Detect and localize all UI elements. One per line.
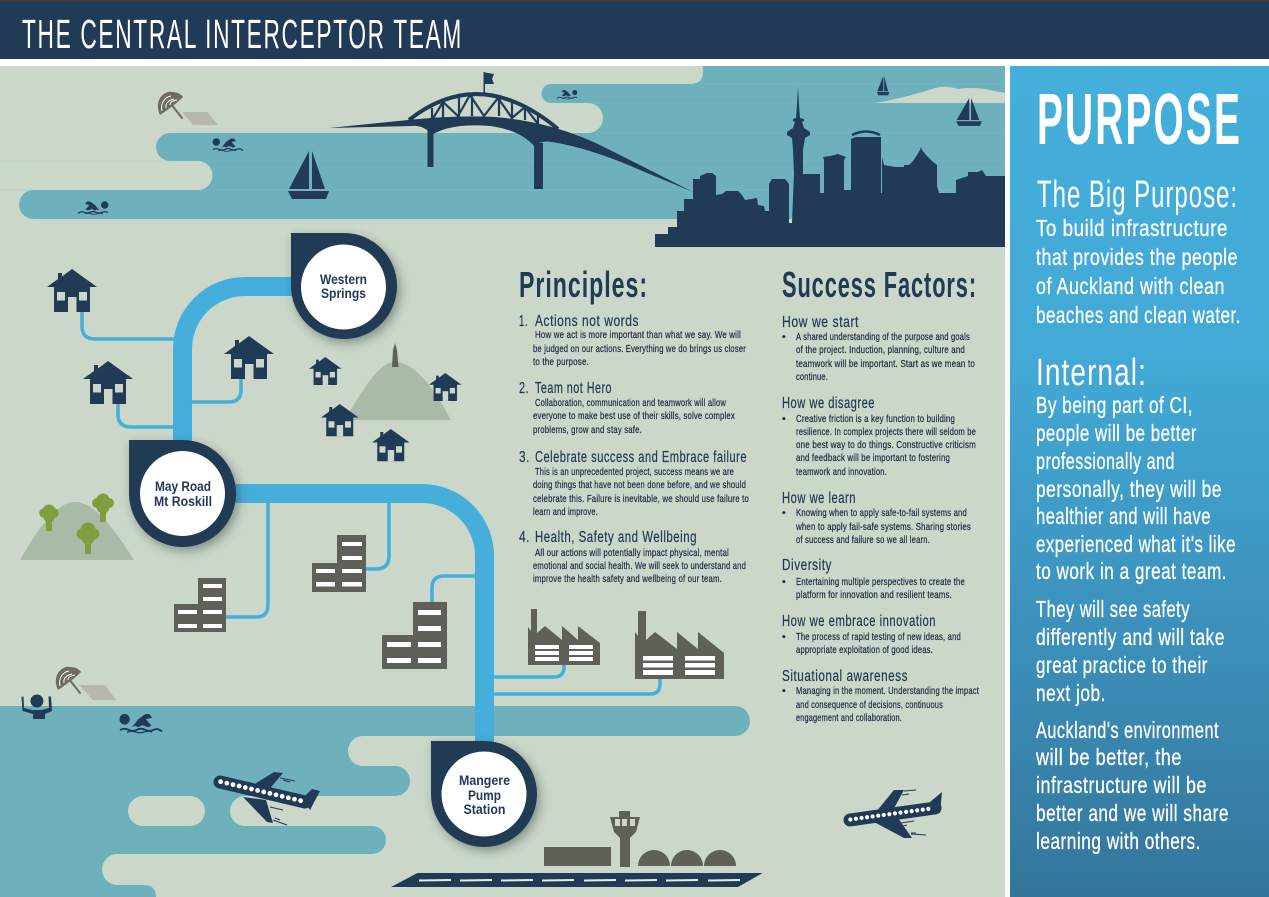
factor: how we embrace innovation: appropriate exploitation of good ideas. [796,644,933,656]
house 2 [83,361,133,404]
pin: may road [129,440,236,547]
airport terminal [544,847,611,866]
principle 2: Team not Hero [535,380,612,397]
land background [0,66,1005,897]
principle 4: emotional and social health. We will seek to understand and [533,560,746,572]
top harbour water [0,66,1005,219]
office building 2 [312,535,366,592]
principle 3 [519,449,749,518]
factor: how we disagree: one best way to do things. Constructive criticism [796,439,976,451]
safety text: next job. [1036,680,1106,706]
house 1 [47,269,97,312]
principle 2: 2. [519,380,529,397]
factor: how we start: of the project. Induction, planning, culture and [796,344,965,356]
factor: situational awareness [782,668,979,724]
factor: how we learn: How we learn [782,490,856,507]
factor: how we learn: • [782,507,786,519]
principle 2: Collaboration, communication and teamwork will allow [535,397,726,409]
factor: how we start: • [782,331,786,343]
pin: may road: May Road [155,479,211,494]
factor: diversity: Diversity [782,557,832,574]
internal text: By being part of CI, [1036,392,1193,418]
factor: how we disagree: • [782,413,786,425]
environment text: infrastructure will be [1036,772,1207,798]
person waving [22,694,52,719]
pin: mangere pump station [431,741,537,847]
factor: how we learn [782,490,971,546]
factor: how we start: A shared understanding of the purpose and goals [796,331,970,343]
factor: how we start: continue. [796,371,828,383]
principle 3: doing things that have not been done before, and we should [533,479,746,491]
success factors heading: Success Factors: [782,264,977,305]
factor: how we disagree: Creative friction is a key function to building [796,413,955,425]
swimmer: bottom [119,714,162,733]
flag [484,72,494,95]
factor: how we embrace innovation: The process of rapid testing of new ideas, and [796,631,961,643]
factory 1 [528,609,600,665]
principle 4: All our actions will potentially impact physical, mental [535,547,729,559]
pin: mangere pump station: Mangere [459,773,510,788]
principle 1: Actions not words [535,313,639,330]
factor: situational awareness: engagement and collaboration. [796,712,902,724]
swimmer: left [78,201,108,214]
principles heading: Principles: [519,264,648,305]
control tower [610,811,640,867]
principle 3: 3. [519,449,530,466]
principle 3: Celebrate success and Embrace failure [535,449,747,466]
harbour bridge [329,72,693,192]
swimmer: top [213,138,243,151]
principle 4: 4. [519,529,530,546]
pin: western springs: Western [320,272,367,287]
beach umbrella: bottom [56,667,116,700]
factor: how we disagree [782,395,976,478]
factor: how we learn: when to apply fail-safe systems. Sharing stories [795,521,971,533]
pin: mangere pump station: Pump [468,788,501,803]
houses [47,269,462,461]
environment text: will be better, the [1035,744,1182,770]
city skyline [655,86,1005,247]
environment text [1035,717,1229,854]
internal text: professionally and [1036,448,1175,474]
factor: how we embrace innovation: • [782,631,786,643]
principles section [519,264,749,585]
factor: how we start: How we start [782,314,859,331]
principle 2 [519,380,735,436]
house connection pipes [82,312,241,427]
safety text: They will see safety [1036,596,1190,622]
pin: may road: Mt Roskill [154,494,212,509]
factor: how we learn: of success and failure so we all learn. [796,534,930,546]
safety text: great practice to their [1036,652,1208,678]
main pipe: may road to mangere [230,494,485,750]
factor: how we disagree: and feedback will be important to fostering [796,452,950,464]
principle 4 [519,529,746,585]
office building 3 [382,602,447,669]
internal text [1036,392,1236,584]
principle 4: improve the health safety and wellbeing of our team. [533,573,722,585]
factor: situational awareness: • [782,685,786,697]
principle 1: 1. [519,313,528,330]
principle 1 [519,313,746,368]
big purpose text: To build infrastructure [1036,215,1228,241]
factor: how we learn: Knowing when to apply safe-to-fail systems and [796,507,967,519]
main pipe: western springs to may road [182,286,295,445]
header bar [0,0,1269,59]
pin: western springs [291,233,397,339]
house 5 [429,373,462,401]
factor: how we disagree: resilience. In complex projects there will seldom be [796,426,976,438]
sailboat: large [288,151,329,199]
hill with obelisk [345,343,451,420]
house 4 [309,357,342,385]
bottom harbour water [0,706,750,897]
pin: western springs: Springs [321,286,366,301]
factor: diversity: Entertaining multiple perspectives to create the [796,576,965,588]
sailboat: right [956,98,982,126]
factor: situational awareness: Managing in the moment. Understanding the impact [796,685,979,697]
principle 2: everyone to make best use of their skills, solve complex [533,410,735,422]
hangars [638,850,736,866]
tower hat [852,132,880,135]
factor: situational awareness: Situational awareness [782,668,908,685]
factor: diversity [782,557,965,601]
factor: how we disagree: How we disagree [782,395,875,412]
factor: situational awareness: and consequence of decisions, continuous [796,699,943,711]
building connection pipes [225,500,660,694]
factor: how we disagree: teamwork and innovation. [796,466,887,478]
principle 2: problems, grow and stay safe. [533,424,642,436]
hill with trees [20,494,134,560]
internal text: people will be better [1036,420,1197,446]
factor: how we embrace innovation [782,613,961,656]
principle 1: be judged on our actions. Everything we do brings us closer [533,343,746,355]
principle 1: to the purpose. [533,356,589,368]
runway [391,873,763,887]
house 6 [321,404,358,436]
principle 4: Health, Safety and Wellbeing [535,529,697,546]
house 7 [372,429,410,461]
principle 3: This is an unprecedented project, success means we are [535,466,734,478]
environment text: learning with others. [1036,828,1201,854]
title: THE CENTRAL INTERCEPTOR TEAM [22,11,463,57]
success factors section [782,264,979,724]
panel: purpose [1010,66,1269,897]
plane: left [220,772,320,825]
house 3 [224,336,274,379]
big purpose text [1036,215,1241,328]
factor: how we start: teamwork will be important. Start as we mean to [796,358,975,370]
beach umbrella: top [158,92,218,125]
factory 2 [635,611,724,679]
office building 1 [174,578,226,632]
internal heading: Internal: [1036,352,1147,394]
swimmer: top right [557,90,577,99]
principle 3: celebrate this. Failure is inevitable, we should use failure to [533,493,749,505]
principle 1: How we act is more important than what we say. We will [535,329,741,341]
pin: mangere pump station: Station [464,802,506,817]
factor: diversity: • [782,576,786,588]
safety text [1036,596,1225,706]
factor: how we start [782,314,975,383]
principle 3: learn and improve. [533,506,598,518]
plane: right [850,790,942,838]
sailboat: small top [877,76,889,95]
factor: diversity: platform for innovation and resilient teams. [796,589,952,601]
factor: how we embrace innovation: How we embrace innovation [782,613,936,630]
